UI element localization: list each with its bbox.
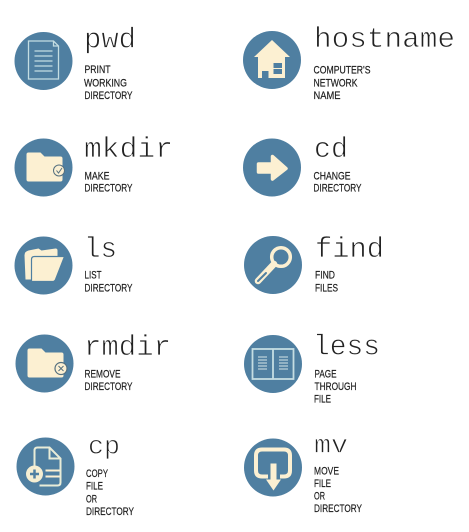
command name: mv [314,430,348,460]
description: REMOVE [84,368,120,380]
command name: mkdir [84,133,173,166]
description: DIRECTORY [84,90,133,102]
description: DIRECTORY [86,506,134,518]
entry: ls [14,233,133,294]
description: FILE [86,480,103,492]
description: DIRECTORY [84,182,133,194]
entry: mkdir [14,133,173,196]
description: FILE [314,394,331,406]
description: FILE [314,478,331,490]
description [314,368,357,406]
icon: open book [244,335,302,393]
icon: box with down arrow [244,438,302,496]
description: NAME [314,90,340,102]
description: OR [86,494,97,506]
entry: cp [16,432,134,518]
entry: find [244,233,384,294]
description [314,466,362,515]
description: MAKE [84,170,110,182]
description [314,64,370,102]
description: DIRECTORY [314,182,362,194]
description: DIRECTORY [84,381,133,393]
entry: pwd [14,24,136,102]
description: WORKING [84,78,127,90]
description [84,64,133,102]
description: COMPUTER'S [314,64,370,76]
entry: hostname [243,23,455,102]
entry: mv [244,430,362,515]
command name: cd [314,133,348,166]
description: DIRECTORY [314,503,362,515]
icon: document [14,32,72,90]
description [314,170,362,194]
description [84,170,133,194]
description: CHANGE [314,170,350,182]
description [86,468,134,518]
command name: less [313,330,380,364]
description [84,368,133,393]
entry: rmdir [16,331,171,393]
icon: folder with cross [16,334,74,392]
entry: less [244,330,380,406]
description: MOVE [314,466,339,478]
description: NETWORK [314,78,358,90]
description: COPY [86,468,108,480]
description: PAGE [314,368,336,380]
command name: find [315,233,384,266]
description: FIND [315,270,335,282]
command name: cp [88,432,120,462]
icon: folder with check [14,138,72,196]
command name: pwd [84,24,136,56]
icon: house [243,31,301,89]
description: LIST [84,270,102,282]
description: OR [314,490,325,502]
icon: arrow [243,138,301,196]
description: PRINT [84,64,111,76]
description: THROUGH [314,381,357,393]
command name: rmdir [84,331,171,364]
description [84,270,133,294]
icon: magnifier [244,236,302,294]
command name: hostname [314,23,455,56]
description: DIRECTORY [84,282,133,294]
icon: open folders [14,236,72,294]
description [315,270,338,294]
command name: ls [84,233,117,266]
icon: document with plus [16,438,74,496]
description: FILES [315,282,338,294]
entry: cd [243,133,362,196]
